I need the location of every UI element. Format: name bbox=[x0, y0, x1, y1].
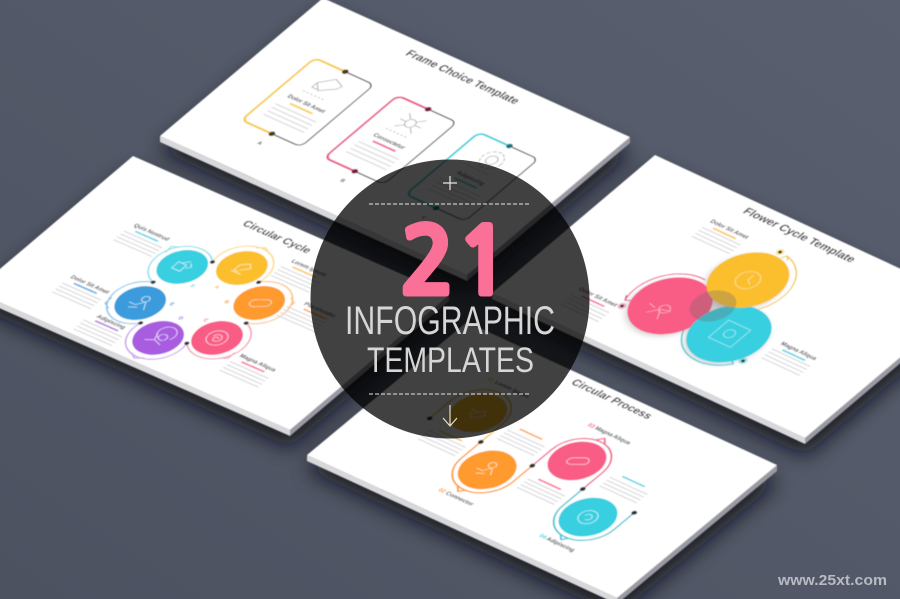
label: lorem ipsum: Lorem Ipsum bbox=[289, 258, 329, 278]
cycle rings bbox=[70, 219, 329, 386]
label: placeholder bbox=[277, 297, 338, 333]
panel: frame choice template bbox=[160, 0, 630, 281]
panel: circular cycle bbox=[0, 156, 449, 436]
cycle letters: D bbox=[176, 316, 185, 321]
label: quis nostrud bbox=[114, 222, 173, 257]
process labels: 04 Adipiscing bbox=[537, 534, 576, 553]
cycle nodes bbox=[82, 227, 317, 378]
dark central badge bbox=[310, 160, 590, 438]
label: magna aliqua bbox=[220, 352, 280, 387]
process dots bbox=[425, 416, 638, 515]
frame C: Adipiscing bbox=[454, 170, 487, 187]
petal shadows bbox=[607, 230, 833, 375]
frame C: C bbox=[420, 215, 428, 221]
label: dolor sit amet: Dolor Sit Amet bbox=[68, 274, 111, 295]
process path bbox=[383, 379, 681, 552]
connector dots bbox=[114, 249, 286, 356]
panel: circular process bbox=[307, 322, 777, 599]
heading: frame choice: Frame Choice Template bbox=[402, 48, 522, 107]
frame A: Dolor Sit Amet bbox=[285, 93, 327, 115]
cycle letters: C bbox=[201, 318, 210, 323]
watermark: www.25xt.com bbox=[777, 573, 887, 589]
label: dolor sit amet pink bbox=[560, 286, 620, 322]
petal dots bbox=[615, 219, 846, 366]
icon: down arrow bbox=[443, 405, 457, 426]
process labels: 02 Connector bbox=[436, 488, 475, 508]
label: quis nostrud: Quis Nostrud bbox=[132, 223, 171, 242]
process labels: 03 Magna Aliqua bbox=[585, 423, 632, 446]
process icons bbox=[422, 406, 641, 526]
headline: infographic: INFOGRAPHIC bbox=[345, 299, 555, 343]
petal arcs bbox=[601, 222, 835, 373]
label: lorem ipsum bbox=[271, 257, 331, 292]
label: adipiscing bbox=[73, 311, 133, 346]
frame B: Consectetur bbox=[371, 132, 408, 151]
cycle letters: A bbox=[212, 285, 221, 290]
label: magna aliqua: Magna Aliqua bbox=[779, 341, 819, 362]
cycle letters bbox=[159, 278, 239, 329]
label: dolor sit amet pink: Dolor Sit Amet bbox=[577, 286, 619, 308]
frame A bbox=[227, 56, 376, 159]
label: dolor sit amet: Dolor Sit Amet bbox=[708, 219, 750, 240]
process labels bbox=[382, 377, 679, 554]
label: magna aliqua bbox=[761, 340, 820, 375]
centre overlap bbox=[680, 285, 746, 327]
heading: circular process: Circular Process bbox=[568, 378, 655, 421]
cycle letters: F bbox=[188, 284, 197, 290]
label: placeholder: Placeholder bbox=[302, 301, 338, 320]
petals bbox=[609, 228, 836, 373]
cycle letters: B bbox=[222, 300, 230, 305]
petal icons bbox=[640, 251, 797, 351]
bottom dashed divider bbox=[369, 393, 531, 395]
number 21: 21 bbox=[400, 216, 511, 308]
cycle letters: E bbox=[168, 302, 176, 307]
frame C bbox=[391, 130, 541, 233]
cycle icons bbox=[105, 242, 295, 364]
label: adipiscing: Adipiscing bbox=[94, 314, 128, 331]
heading: flower cycle: Flower Cycle Template bbox=[740, 206, 858, 265]
process labels: 01 Lorem Ipsum bbox=[485, 377, 530, 400]
heading: circular cycle: Circular Cycle bbox=[239, 219, 314, 256]
headline: templates: TEMPLATES bbox=[367, 341, 534, 380]
icon: plus bbox=[443, 176, 457, 190]
label: dolor sit amet bbox=[52, 274, 112, 309]
top dashed divider bbox=[369, 203, 531, 205]
process text blocks bbox=[416, 402, 652, 528]
process circles bbox=[395, 387, 671, 544]
label: magna aliqua: Magna Aliqua bbox=[237, 353, 278, 373]
frame B: B bbox=[338, 178, 346, 184]
frame B bbox=[310, 94, 459, 197]
frame A: A bbox=[255, 141, 264, 146]
label: dolor sit amet bbox=[692, 218, 751, 254]
panel: flower cycle template bbox=[492, 155, 900, 444]
